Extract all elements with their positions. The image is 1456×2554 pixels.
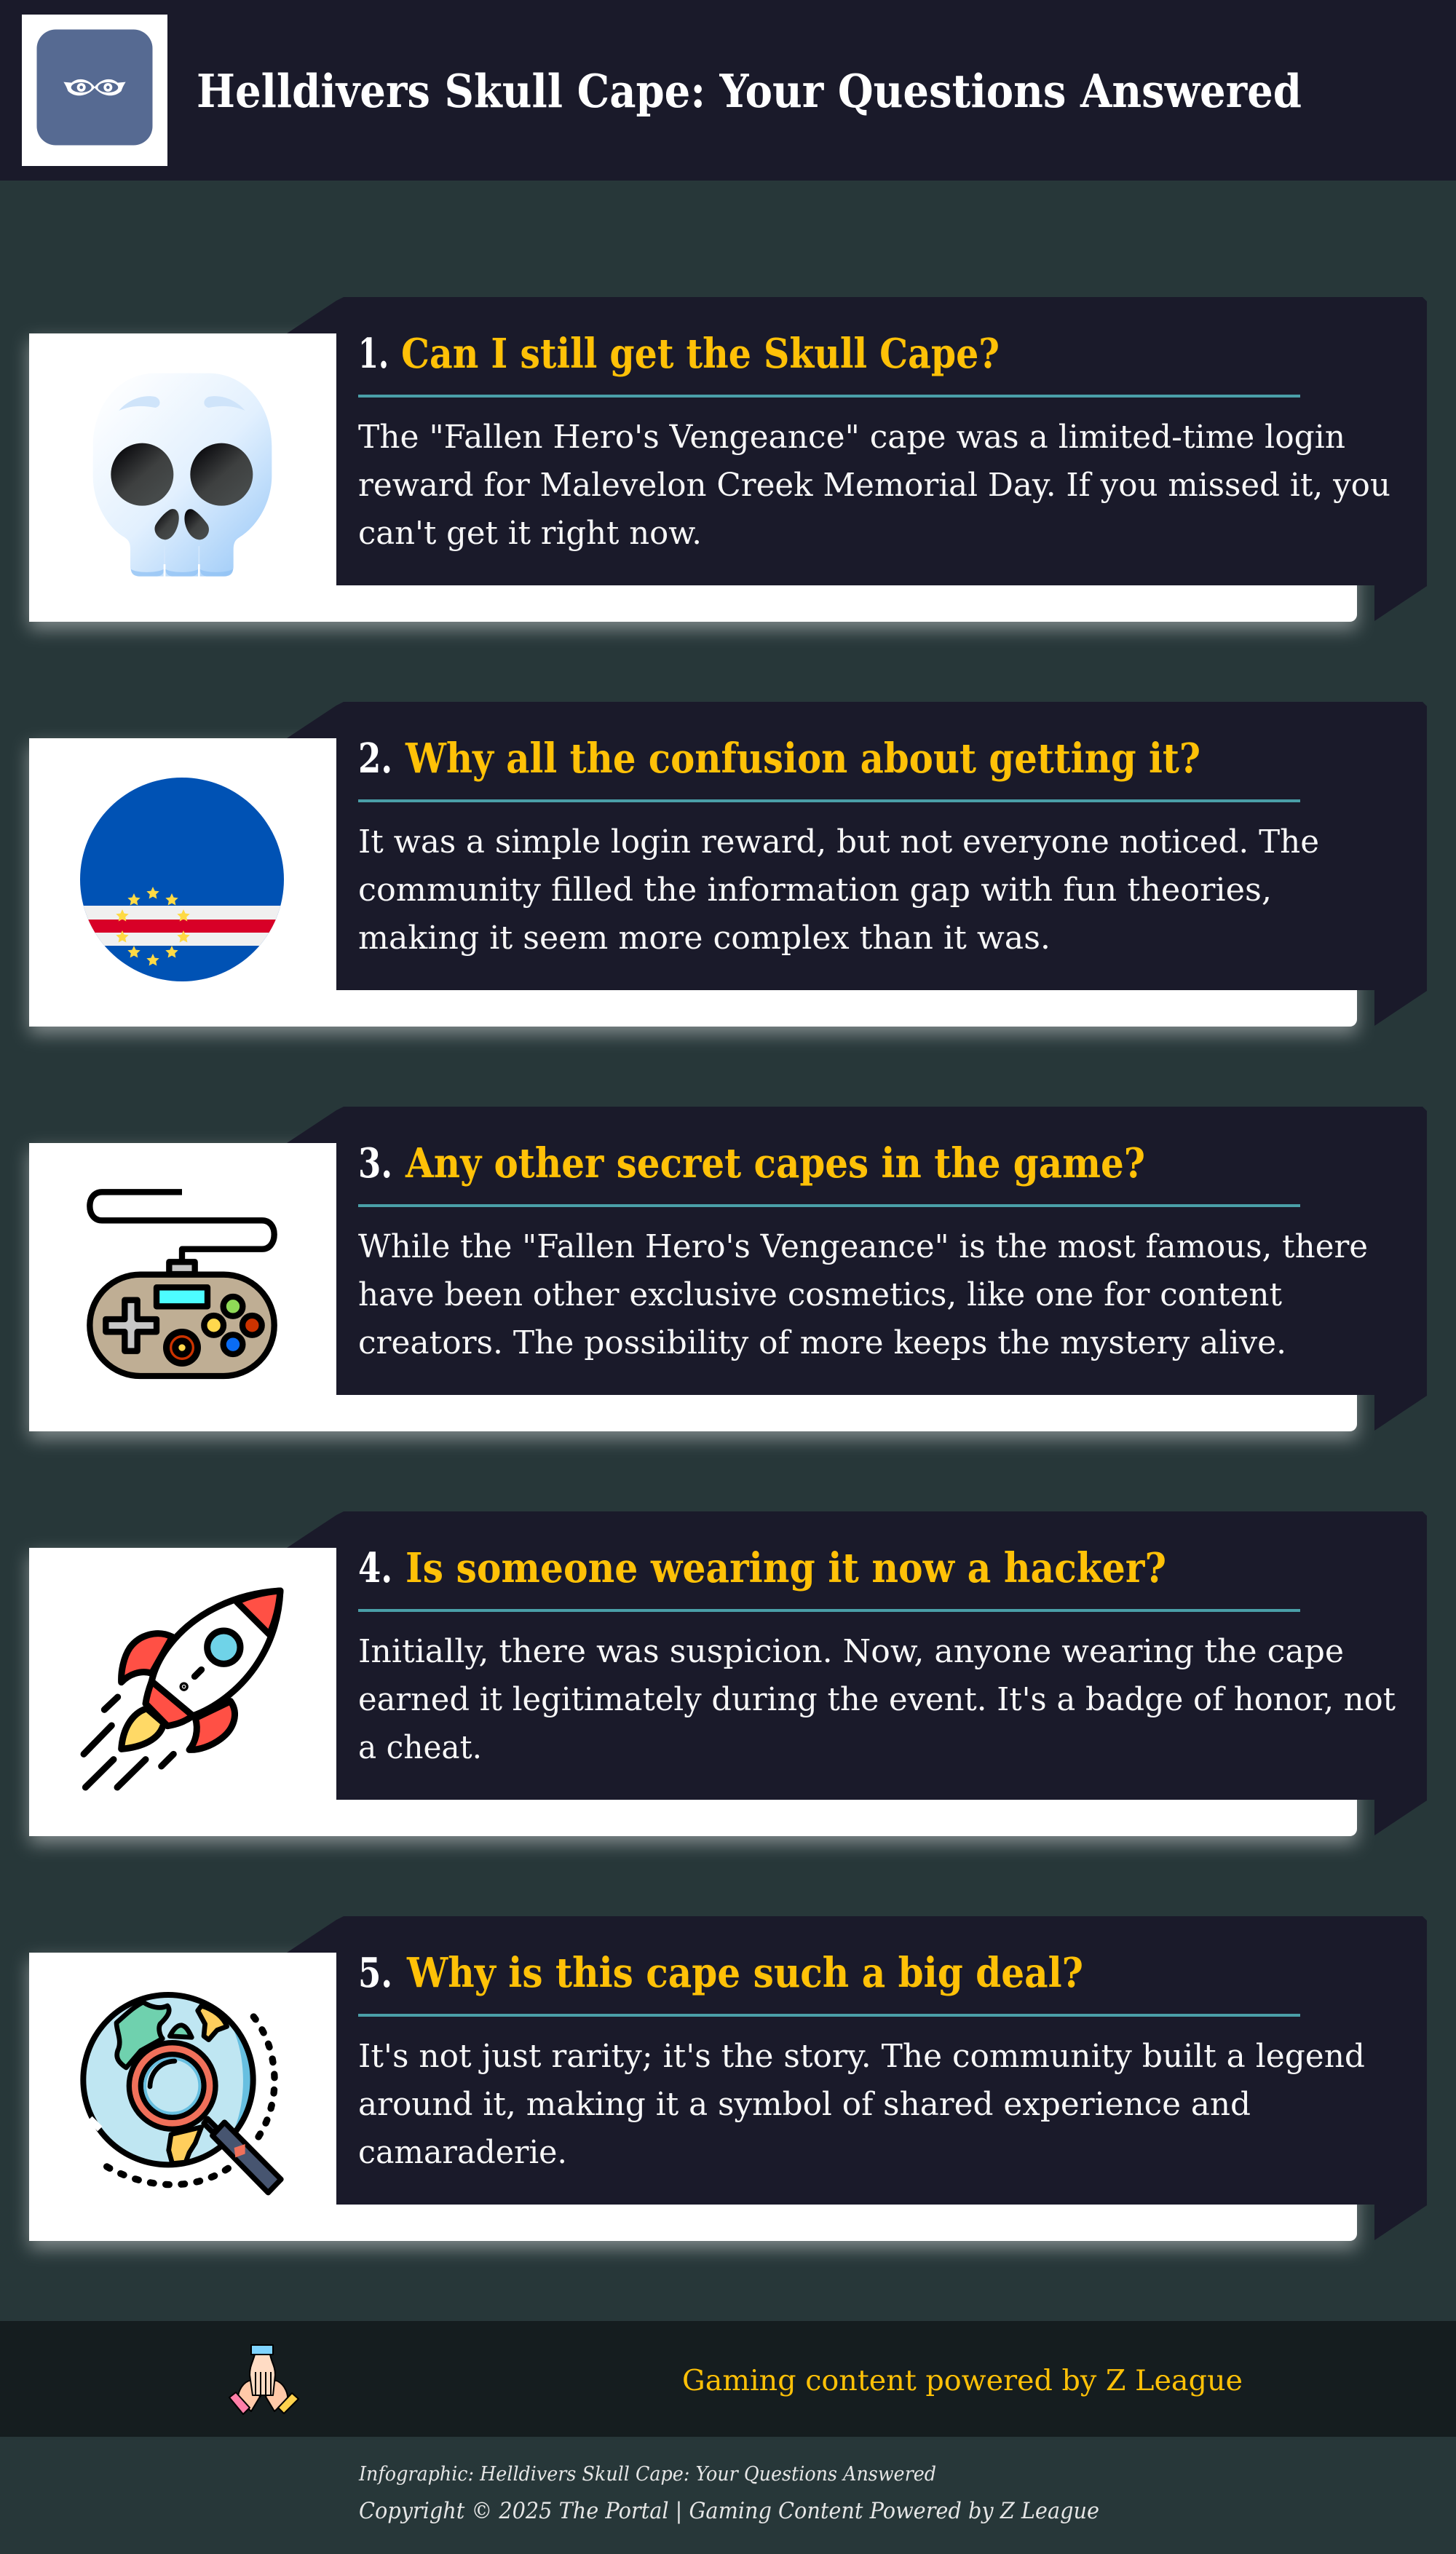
heading: Can I still get the Skull Cape? <box>401 330 1000 378</box>
body text <box>358 823 1319 957</box>
title: Helldivers Skull Cape: Your Questions Answered <box>197 64 1302 118</box>
card 2 <box>29 702 1427 1034</box>
heading: Any other secret capes in the game? <box>405 1139 1145 1187</box>
sponsor text: Gaming content powered by Z League <box>682 2365 1243 2397</box>
icon: skull <box>93 373 272 577</box>
card 4 <box>29 1511 1427 1843</box>
icon: joined hands <box>229 2345 298 2414</box>
icon: game controller <box>90 1192 274 1376</box>
body text: While the "Fallen Hero's Vengeance" is the most famous, there <box>358 1228 1368 1265</box>
card 3 <box>29 1107 1427 1439</box>
body text <box>358 2038 1365 2171</box>
body text: It was a simple login reward, but not everyone noticed. The <box>358 823 1319 861</box>
body text: around it, making it a symbol of shared experience and <box>358 2086 1251 2123</box>
icon: rocket <box>84 1591 280 1787</box>
body text: have been other exclusive cosmetics, like one for content <box>358 1276 1282 1313</box>
body text: creators. The possibility of more keeps the mystery alive. <box>358 1324 1286 1361</box>
heading: 4. <box>358 1544 392 1592</box>
card 5 <box>29 1916 1427 2248</box>
footer band <box>0 2321 1456 2437</box>
body text: camaraderie. <box>358 2134 567 2171</box>
body text: a cheat. <box>358 1729 482 1766</box>
footnote: Copyright © 2025 The Portal | Gaming Content Powered by Z League <box>359 2498 1099 2524</box>
body text <box>358 419 1390 552</box>
icon: globe with magnifier <box>83 1995 281 2193</box>
heading: Why is this cape such a big deal? <box>406 1949 1083 1997</box>
body text: can't get it right now. <box>358 515 702 552</box>
body text: Initially, there was suspicion. Now, anyone wearing the cape <box>358 1633 1344 1670</box>
body text: reward for Malevelon Creek Memorial Day. If you missed it, you <box>358 467 1390 504</box>
body text: making it seem more complex than it was. <box>358 920 1051 957</box>
body text: community filled the information gap with fun theories, <box>358 871 1272 909</box>
icon: eyes <box>63 79 126 95</box>
body text: It's not just rarity; it's the story. The community built a legend <box>358 2038 1365 2075</box>
footnote <box>358 2463 1099 2524</box>
heading: Is someone wearing it now a hacker? <box>405 1544 1166 1592</box>
heading: 5. <box>358 1949 392 1997</box>
heading: 1. <box>358 330 389 378</box>
card 1 <box>29 297 1427 629</box>
logo <box>22 15 167 166</box>
heading: 2. <box>358 735 392 783</box>
header bar <box>0 0 1456 181</box>
body text: earned it legitimately during the event. It's a badge of honor, not <box>358 1681 1396 1718</box>
heading: Why all the confusion about getting it? <box>405 735 1200 783</box>
icon: flag <box>73 778 291 981</box>
body text <box>358 1633 1396 1766</box>
body text: The "Fallen Hero's Vengeance" cape was a limited-time login <box>358 419 1345 456</box>
body text <box>358 1228 1368 1361</box>
heading: 3. <box>358 1139 392 1187</box>
footnote: Infographic: Helldivers Skull Cape: Your Questions Answered <box>358 2463 936 2486</box>
